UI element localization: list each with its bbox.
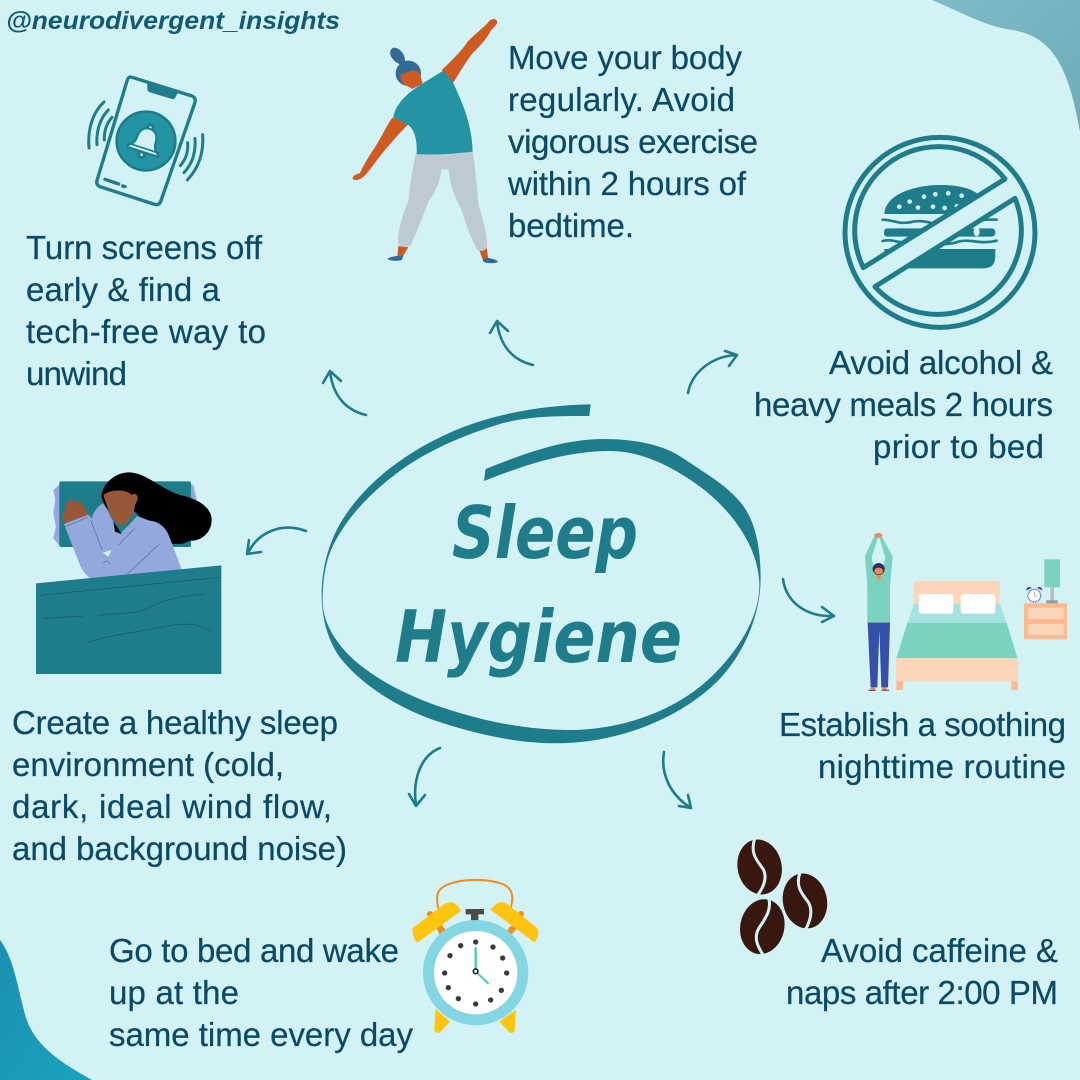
icon: woman sleeping in bed — [36, 472, 221, 674]
icon: phone with bell — [89, 77, 203, 205]
arrow: to alarm clock — [409, 748, 440, 806]
arrow: to food — [688, 351, 737, 393]
arrow: to routine — [783, 579, 834, 622]
text: bed and wake time: up at the — [109, 974, 239, 1011]
text: move your body: vigorous exercise — [508, 123, 758, 160]
text: bed and wake time: same time every day — [109, 1016, 414, 1053]
text: routine — [779, 706, 1066, 785]
corner blob: top right — [932, 0, 1080, 132]
text: sleep environment — [12, 704, 347, 867]
icon: exercising figure — [353, 20, 498, 263]
title: Hygiene — [395, 595, 682, 679]
title: Sleep — [452, 491, 638, 575]
text: screens: early & find a — [26, 271, 221, 308]
text: alcohol and heavy meals: prior to bed — [873, 428, 1044, 465]
text: sleep environment: environment (cold, — [12, 746, 284, 783]
text: bed and wake time — [109, 932, 414, 1053]
center swoosh circle — [322, 404, 761, 743]
arrow: to screens — [323, 371, 366, 415]
text: routine: Establish a soothing — [779, 706, 1066, 743]
text: caffeine: naps after 2:00 PM — [786, 974, 1058, 1011]
title — [395, 491, 682, 679]
text: screens: Turn screens off — [26, 229, 263, 266]
arrow: to exercise — [490, 321, 533, 365]
text: sleep environment: and background noise) — [12, 830, 347, 867]
arrow: to sleep environment — [247, 528, 306, 554]
text: sleep environment: dark, ideal wind flow, — [12, 788, 332, 825]
text: routine: nighttime routine — [818, 748, 1066, 785]
text: alcohol and heavy meals: Avoid alcohol & — [829, 344, 1053, 381]
corner blob: bottom left — [0, 940, 92, 1080]
text: screens — [26, 229, 266, 392]
text: move your body: within 2 hours of — [507, 165, 747, 202]
text: bed and wake time: Go to bed and wake — [109, 932, 399, 969]
text: sleep environment: Create a healthy sleep — [12, 704, 338, 741]
text: alcohol and heavy meals: heavy meals 2 hours — [754, 386, 1053, 423]
handle: @neurodivergent_insights — [6, 7, 340, 35]
text: alcohol and heavy meals — [754, 344, 1053, 465]
text: move your body: regularly. Avoid — [508, 81, 735, 118]
icon: alarm clock — [413, 880, 538, 1032]
text: screens: unwind — [26, 355, 127, 392]
text: move your body — [507, 39, 758, 244]
icon: coffee beans — [732, 835, 832, 958]
text: caffeine — [786, 932, 1058, 1011]
icon: stretching person and bed — [865, 533, 1067, 691]
arrow: to coffee — [663, 752, 691, 808]
text: caffeine: Avoid caffeine & — [821, 932, 1058, 969]
text: move your body: Move your body — [508, 39, 742, 76]
text: move your body: bedtime. — [508, 207, 634, 244]
text: screens: tech-free way to — [26, 313, 266, 350]
icon: no burger sign — [845, 137, 1035, 327]
